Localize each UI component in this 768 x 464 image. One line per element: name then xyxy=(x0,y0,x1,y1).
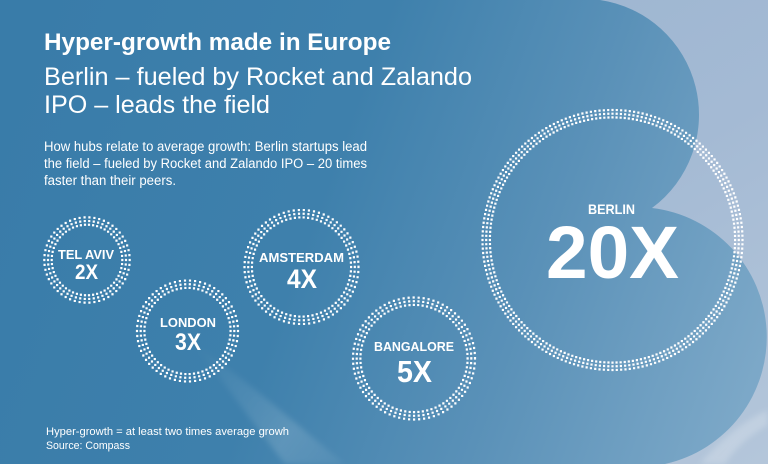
dotted ring: Tel Aviv xyxy=(44,217,130,303)
intro text block: the field – fueled by Rocket and Zalando IPO – 20 times xyxy=(44,156,367,171)
subtitle: Berlin – fueled by Rocket and Zalando xyxy=(44,63,472,91)
value: 5X: 5X xyxy=(397,354,432,389)
value: 2X: 2X xyxy=(75,261,98,284)
label: Berlin: BERLIN xyxy=(588,201,635,217)
value: 4X: 4X xyxy=(287,264,317,294)
dotted ring: Berlin xyxy=(482,110,742,370)
label: Tel Aviv: TEL AVIV xyxy=(58,247,114,262)
dotted ring: London xyxy=(137,280,238,382)
hub: London 3X xyxy=(137,280,238,382)
intro text block: How hubs relate to average growth: Berlin startups lead xyxy=(44,139,367,154)
intro text block xyxy=(44,139,367,188)
value: 20X: 20X xyxy=(546,211,679,294)
footnote and source: Source: Compass xyxy=(46,440,130,452)
label: Bangalore: BANGALORE xyxy=(374,339,454,354)
label: Amsterdam: AMSTERDAM xyxy=(259,250,344,265)
dotted ring: Amsterdam xyxy=(244,210,358,324)
hub: Amsterdam 4X xyxy=(244,210,358,324)
footnote and source xyxy=(46,426,289,452)
subtitle: IPO – leads the field xyxy=(44,91,270,119)
subtitle xyxy=(44,63,472,119)
footnote and source: Hyper-growth = at least two times average growh xyxy=(46,426,289,438)
value: 3X: 3X xyxy=(175,329,201,356)
background: pale arc lower right xyxy=(700,410,768,464)
hub: Tel Aviv 2X xyxy=(44,217,130,303)
intro text block: faster than their peers. xyxy=(44,173,176,188)
label: London: LONDON xyxy=(160,315,216,330)
hub: Bangalore 5X xyxy=(353,298,475,420)
background: soft light streak xyxy=(195,345,345,464)
dotted ring: Bangalore xyxy=(353,298,475,420)
hub: Berlin 20X xyxy=(482,110,742,370)
title: Hyper-growth made in Europe xyxy=(44,29,391,56)
